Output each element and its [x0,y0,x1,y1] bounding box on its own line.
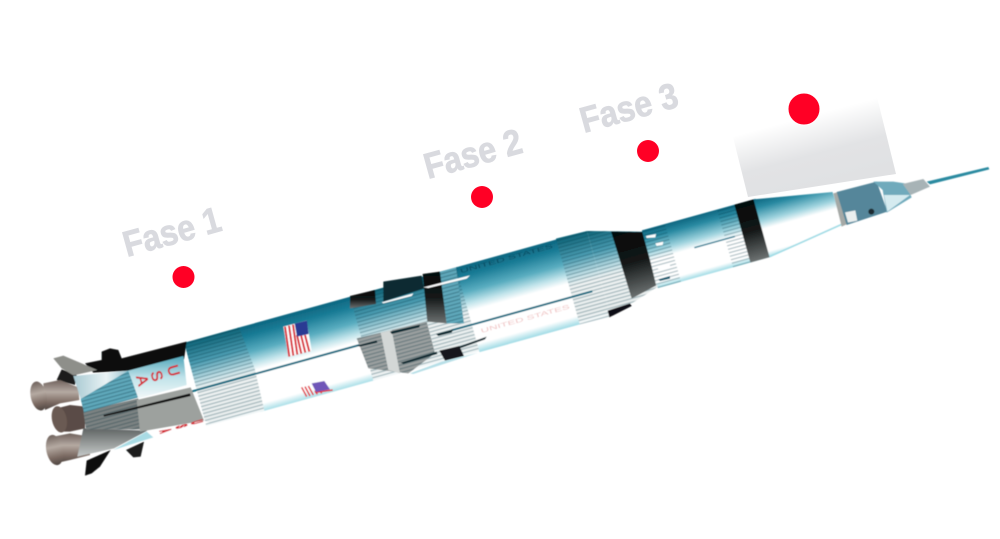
third stage black band [734,199,770,263]
lower nozzle [43,433,90,467]
dark rear block [57,369,77,385]
interstage white slots [382,275,470,303]
rocket [28,164,989,476]
marker dot: Fase 1 [172,266,194,288]
gray gradient panel behind nose [733,97,896,197]
upper pale tail fairing [73,371,128,399]
interstage pale tube [381,330,400,373]
small lower fin [126,442,144,457]
conical adapter [587,216,664,317]
interstage black block [350,290,376,308]
upper nozzle [28,380,79,412]
ribbed gray tail panel [83,398,141,429]
marker dot: Fase 3 [637,140,659,162]
marker dot: Fase 4 [788,93,820,125]
lower black fin [85,450,111,476]
service module collar [833,192,847,227]
second stage ribbed band [556,230,611,325]
plain gray tail panel [137,387,204,432]
second stage markings: UNITED STATES [460,244,554,275]
second stage seam line [451,290,593,331]
command module [873,182,912,213]
label: Fase 1: Fase 1 [118,198,226,265]
interstage raised fairing [383,276,424,302]
lower gray fairing [77,428,147,457]
USA panel [128,356,187,398]
USA lettering [132,363,183,388]
lower USA lettering: A [156,428,173,435]
lower pale teal fairing [113,432,153,450]
middle nozzle [49,405,85,434]
label: Fase 2: Fase 2 [419,120,527,187]
interstage dark slots [357,325,487,364]
lower USA lettering [156,419,204,435]
flag: lower [302,381,333,397]
rocket body stages [176,164,850,431]
USA lettering: U [163,363,183,378]
label: Fase 3: Fase 3 [575,74,683,141]
interstage lower black block [439,346,464,361]
interstage ribbed teal block [440,267,464,323]
black slot [103,393,191,417]
USA lettering: A [132,373,152,388]
third stage dark slot [658,276,670,281]
second stage pink markings: UNITED STATES [480,305,571,335]
spacecraft [833,167,989,227]
service module [837,182,887,225]
upper black fin and wedge [85,342,187,373]
lower white skin [113,421,209,450]
first stage [237,296,374,412]
tail section [28,321,333,476]
first stage seam line [189,343,363,393]
service module white panel [845,210,857,223]
escape tower truss [903,179,930,195]
interstage [350,267,480,381]
service module vent [868,209,874,215]
USA lettering: S [147,369,166,383]
lower USA lettering: S [172,423,189,430]
third stage white slots [646,234,670,269]
third stage [642,199,772,288]
interstage gray lower ribs [357,322,435,373]
tapered upper cone [754,178,846,257]
command module highlight [884,195,910,212]
interstage detail [350,234,670,374]
third stage thin line [694,236,735,248]
second stage [456,239,581,352]
marker dot: Fase 2 [471,186,493,208]
black adapter band [611,223,660,299]
escape rod [927,167,989,184]
ribbed teal tail fairing [81,371,138,412]
gray upper fin [53,356,97,375]
flag: upper [283,321,312,357]
lower USA lettering: U [188,419,204,426]
interstage black band [423,272,447,323]
interstage lower pale skin [410,353,478,374]
third stage ribbed collar [642,205,750,288]
adapter lower black wedge [608,303,632,317]
first stage ribbed band [183,326,266,427]
cone lower edge highlight [766,224,846,257]
